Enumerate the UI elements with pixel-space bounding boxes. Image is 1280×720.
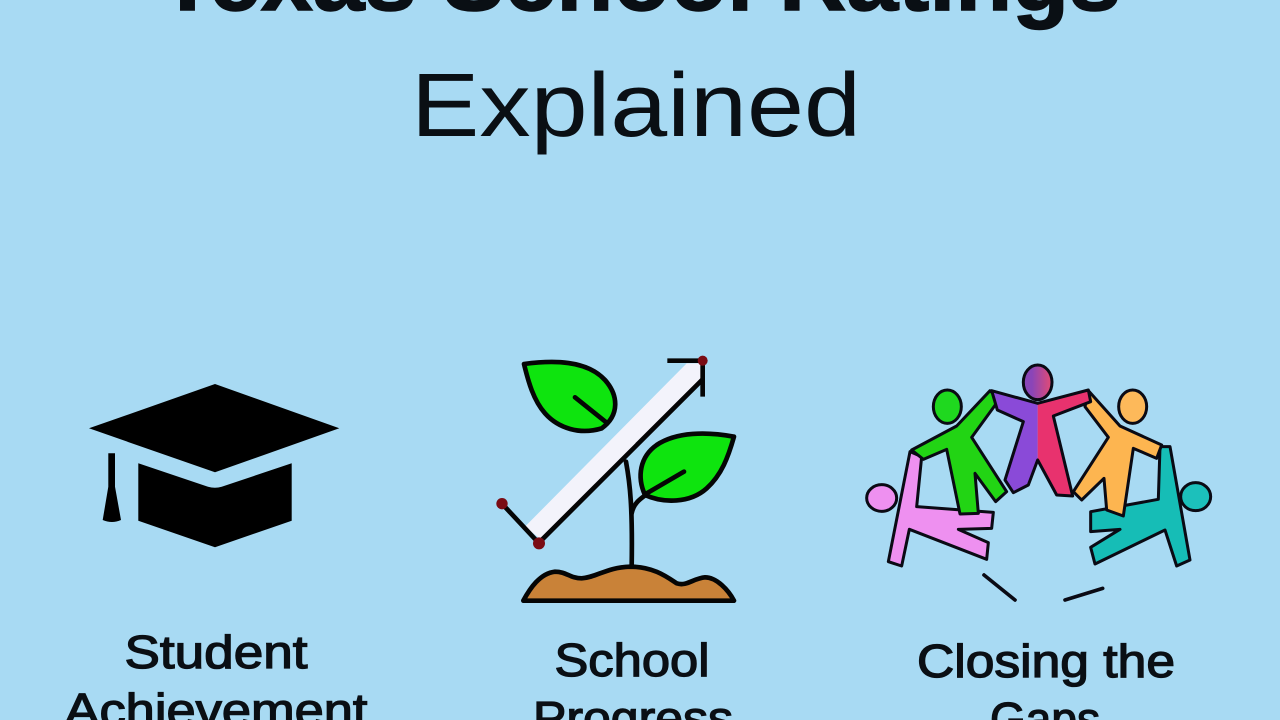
label: student achievement [64, 626, 368, 720]
title [159, 0, 1121, 156]
subtitle: Explained [411, 56, 861, 156]
label: school progress: School [554, 634, 710, 686]
label: closing the gaps [917, 635, 1175, 720]
icon: people linked in an arc [867, 365, 1211, 600]
icon: graduation cap [89, 384, 339, 547]
label: closing the gaps: Closing the [917, 635, 1175, 687]
label: school progress [533, 634, 733, 720]
icon: plant with rising arrow [496, 356, 734, 601]
label: student achievement: Student [124, 626, 308, 678]
